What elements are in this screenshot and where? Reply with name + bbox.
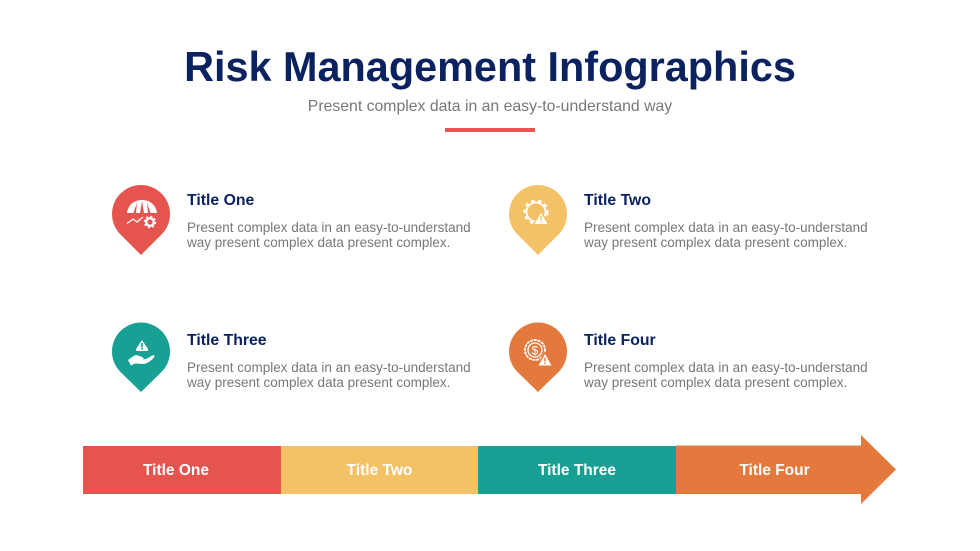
text block: Present complex data in an easy-to-understand [584, 360, 868, 374]
text block [187, 220, 471, 250]
label: title three: Title Three [538, 462, 616, 479]
label: title one: Title One [143, 462, 209, 479]
heading: Title One [187, 192, 254, 209]
text block: Present complex data in an easy-to-understand [584, 220, 868, 234]
text block: way present complex data present complex. [584, 234, 847, 250]
subtitle: Present complex data in an easy-to-understand way [308, 98, 672, 115]
title: Risk Management Infographics [184, 44, 796, 90]
text block [584, 360, 868, 390]
text block: Present complex data in an easy-to-understand [187, 360, 471, 374]
text block [187, 360, 471, 390]
label: title two: Title Two [347, 462, 412, 479]
title underline [445, 128, 535, 132]
heading: Title Three [187, 332, 267, 349]
panel: title three [112, 322, 471, 392]
segment: title four arrow [676, 435, 896, 504]
segment: title three [478, 446, 676, 494]
text block: way present complex data present complex. [187, 374, 450, 390]
text block: way present complex data present complex. [187, 234, 450, 250]
text block: way present complex data present complex. [584, 374, 847, 390]
panel: title two [509, 185, 868, 255]
panel: title four [509, 322, 868, 392]
text block: Present complex data in an easy-to-understand [187, 220, 471, 234]
arrow timeline [83, 435, 896, 504]
heading: Title Four [584, 332, 656, 349]
icon: coin warning pin [509, 322, 567, 392]
segment: title two [281, 446, 478, 494]
icon: umbrella pin [112, 185, 170, 255]
icon: gear warning pin [509, 185, 567, 255]
text block [584, 220, 868, 250]
heading: Title Two [584, 192, 651, 209]
label: title four: Title Four [739, 462, 810, 479]
panel: title one [112, 185, 471, 255]
segment: title one [83, 446, 281, 494]
icon: coin warning pin: $ [532, 344, 539, 358]
icon: hand warning pin [112, 322, 170, 392]
